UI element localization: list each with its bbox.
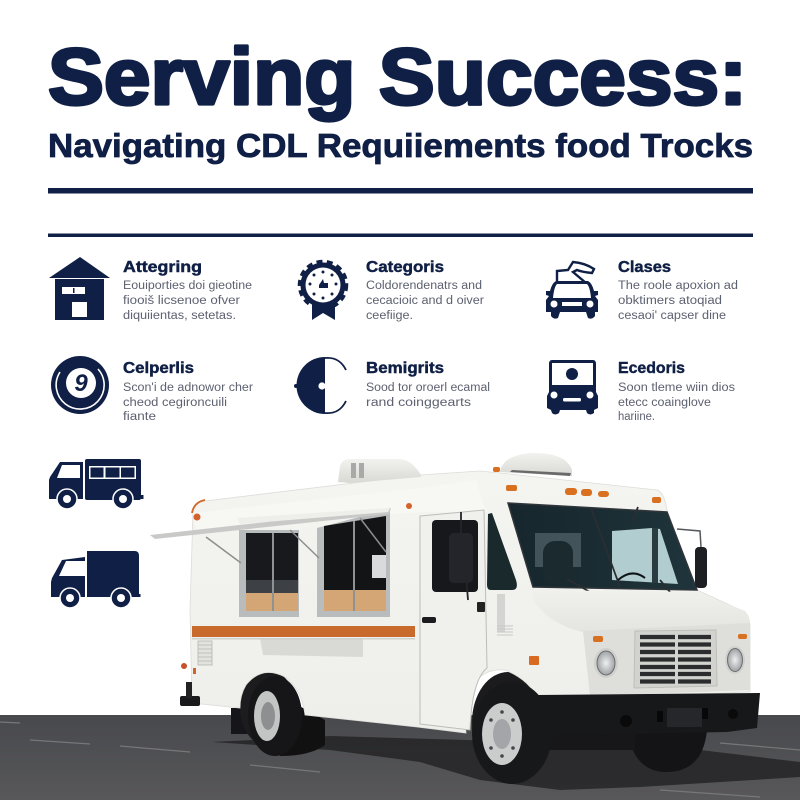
service window left [239, 530, 299, 617]
icon: box truck with windows [49, 459, 144, 509]
front roof dome [500, 453, 572, 476]
awning [150, 508, 391, 563]
front face [583, 623, 750, 696]
rear roof orange trim [192, 500, 205, 513]
food truck [150, 453, 760, 784]
rear bumper and lights [180, 503, 412, 706]
subtitle: Navigating CDL Requiiements food Trocks [48, 128, 753, 165]
text block: fiante [123, 411, 156, 423]
roof marker lights [493, 467, 661, 503]
icon: house [49, 257, 110, 320]
cab side window [487, 513, 517, 590]
heading: Ecedoris [618, 360, 685, 377]
text block: ceefiige. [366, 310, 413, 322]
text block: fiooiš licsenoe ofver [123, 295, 240, 307]
item: Bemigrits [294, 357, 490, 414]
heading: Bemigrits [366, 360, 444, 377]
text block [366, 280, 484, 322]
item: Attegring [49, 257, 252, 322]
text block: cecacioic and d oiver [366, 295, 484, 307]
front wheel [472, 682, 552, 784]
rear wheel set [231, 670, 325, 756]
icon: award badge [300, 262, 346, 320]
box body [190, 471, 750, 733]
front wheel arch [472, 672, 544, 772]
rear vent [198, 641, 212, 665]
text block: cesaoi' capser dine [618, 310, 726, 322]
text block: Scon'i de adnowor cher [123, 382, 253, 394]
asphalt ground [0, 715, 800, 800]
text block [123, 280, 252, 322]
text block: Eouiporties doi gieotine [123, 280, 252, 292]
text block: cheod cegironcuili [123, 397, 227, 409]
item: Celperlis [51, 356, 253, 423]
icon: half circle [294, 357, 346, 414]
front bumper [537, 693, 760, 735]
heading: Categoris [366, 259, 444, 276]
text block: obktimers atoqiad [618, 295, 722, 307]
icon: box truck solid [51, 551, 140, 608]
text block: hariine. [618, 411, 655, 423]
icon: van front [547, 360, 598, 414]
windshield [508, 503, 697, 592]
heading: Attegring [123, 259, 202, 276]
far front wheel [545, 730, 707, 772]
text block [618, 280, 738, 322]
orange stripe [192, 626, 415, 657]
item: Ecedoris [547, 360, 735, 423]
rear air conditioner [338, 459, 421, 483]
side door [420, 510, 487, 730]
heading: Clases [618, 259, 671, 276]
text block: Coldorendenatrs and [366, 280, 482, 292]
text block: diquiientas, setetas. [123, 310, 236, 322]
hood [533, 590, 750, 632]
title: Serving Success: [48, 32, 747, 121]
text block: Sood tor oroerl ecamal [366, 382, 490, 394]
roof band [193, 480, 490, 530]
text block [618, 382, 735, 423]
headlights and indicators [593, 634, 747, 678]
icon: dial with number [51, 356, 109, 414]
item: Clases [546, 259, 738, 322]
text block [123, 382, 253, 423]
heading: Celperlis [123, 360, 194, 377]
icon: dial with number: 9 [74, 370, 88, 397]
icon: food truck front [546, 262, 598, 319]
text block [366, 382, 490, 409]
service window right [317, 509, 390, 617]
grille [634, 630, 717, 688]
text block: etecc coainglove [618, 397, 711, 409]
item: Categoris [300, 259, 484, 322]
side mirror [449, 512, 473, 600]
text block: Soon tleme wiin dios [618, 382, 735, 394]
text block: rand coinggearts [366, 397, 471, 409]
right mirror [677, 529, 707, 588]
text block: The roole apoxion ad [618, 280, 738, 292]
cab side details [477, 594, 539, 665]
